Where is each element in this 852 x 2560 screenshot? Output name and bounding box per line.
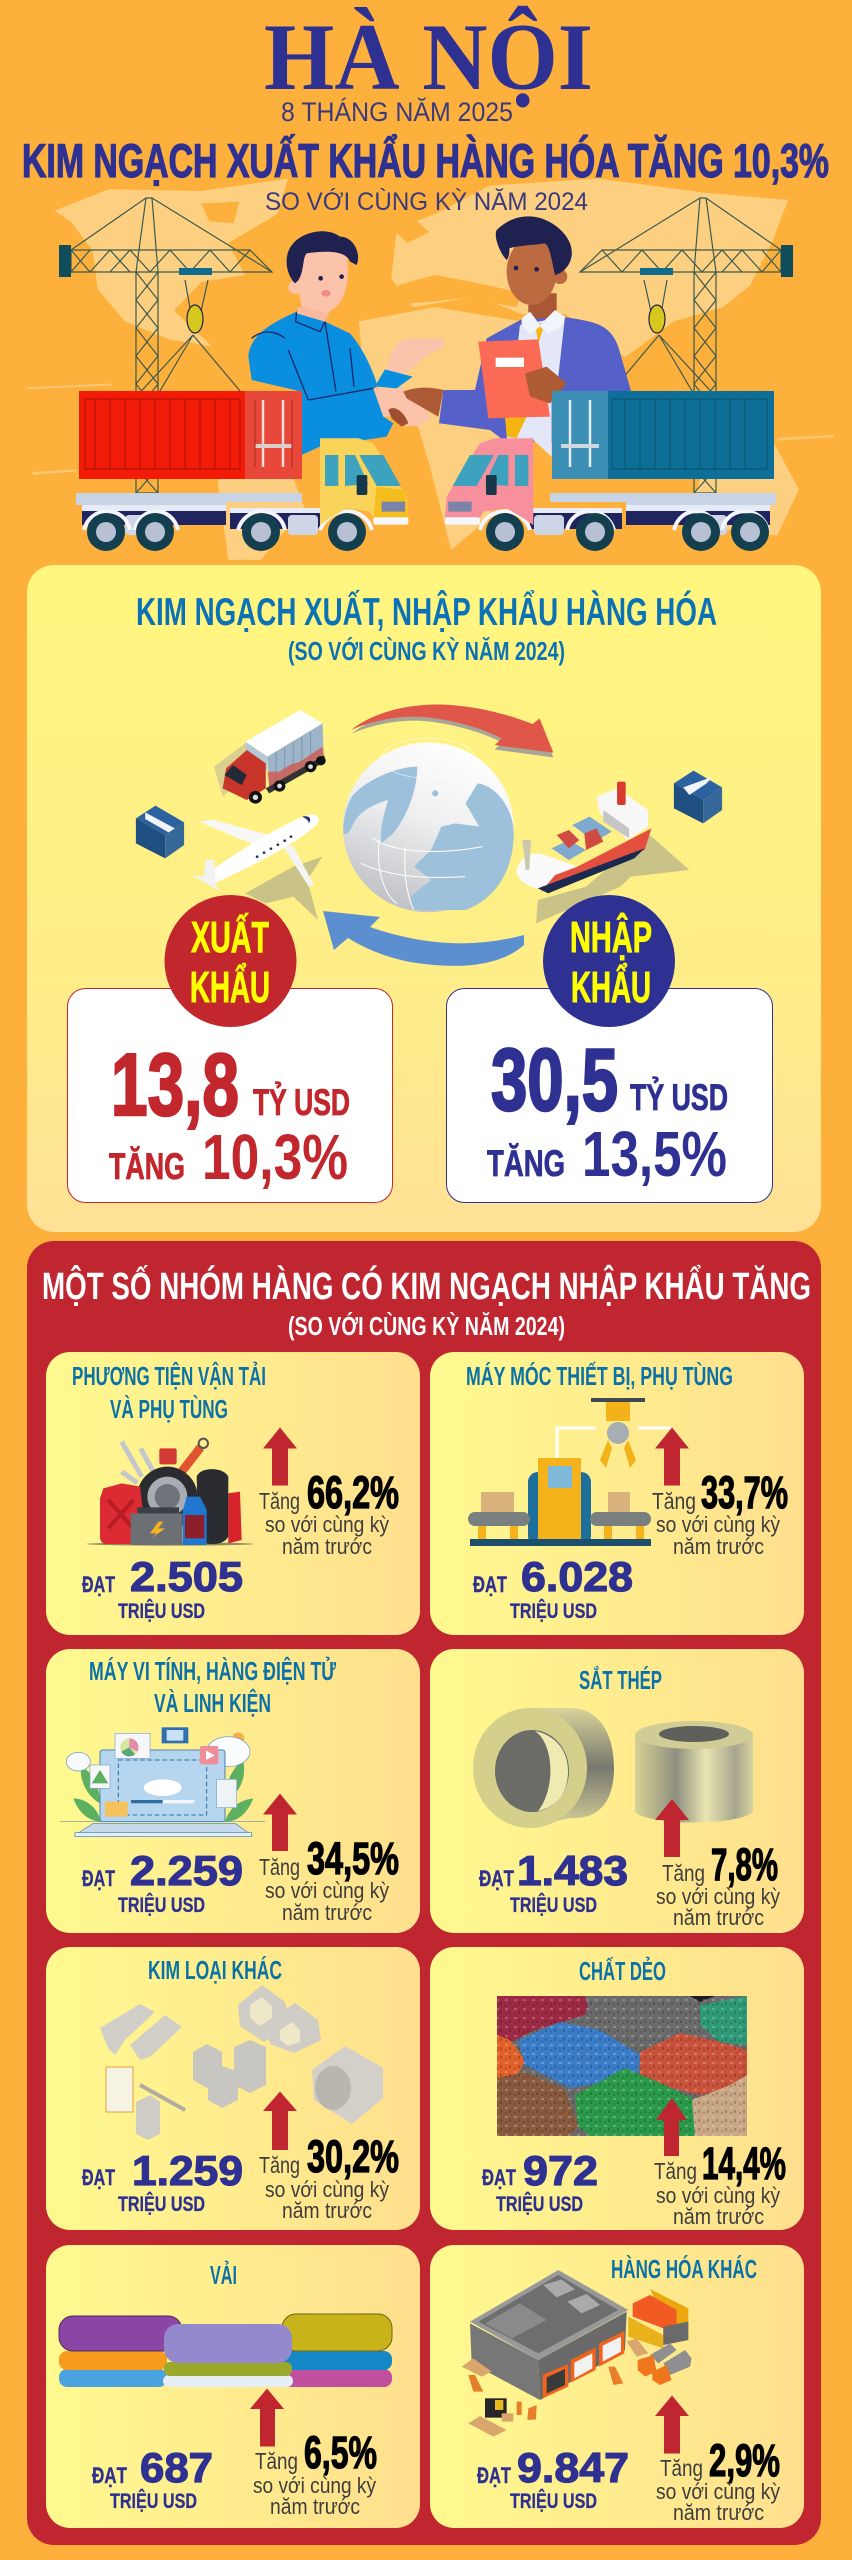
growth note: năm trước bbox=[282, 2198, 372, 2223]
value: 972 bbox=[523, 2147, 598, 2194]
growth note bbox=[654, 2138, 786, 2229]
growth note: so với cùng kỳ bbox=[265, 2177, 389, 2202]
growth note bbox=[253, 2427, 377, 2519]
right man in purple suit bbox=[439, 216, 632, 457]
icon: fabric stacks bbox=[59, 2314, 392, 2387]
arrow up bbox=[655, 1428, 689, 1486]
card: other goods bbox=[430, 2245, 804, 2528]
value: TRIỆU USD bbox=[118, 1893, 205, 1917]
growth note: Tăng bbox=[654, 2158, 697, 2184]
value: ĐẠT bbox=[92, 2463, 127, 2488]
badge: import: KHẨU bbox=[571, 961, 651, 1012]
card title: VÀ PHỤ TÙNG bbox=[110, 1394, 228, 1424]
label: increase: TĂNG bbox=[109, 1146, 185, 1187]
value bbox=[82, 1847, 243, 1917]
value bbox=[482, 2147, 598, 2216]
value: ĐẠT bbox=[479, 1866, 514, 1891]
photo: plastic granules bbox=[497, 1996, 747, 2136]
growth note bbox=[656, 2435, 780, 2525]
icon: cargo ship bbox=[516, 782, 689, 923]
growth note bbox=[259, 2131, 399, 2223]
icon: right parcel box bbox=[674, 771, 722, 823]
growth note: năm trước bbox=[673, 1534, 764, 1559]
icon: warehouse and logistics bbox=[462, 2270, 692, 2437]
comparison subtitle: SO VỚI CÙNG KỲ NĂM 2024 bbox=[265, 187, 588, 216]
badge: import bbox=[543, 895, 675, 1027]
badge: import: NHẬP bbox=[570, 912, 652, 962]
growth note: năm trước bbox=[673, 1905, 764, 1930]
value: TRIỆU USD bbox=[496, 2192, 583, 2216]
icon: steel coils bbox=[473, 1708, 753, 1828]
left man in blue shirt bbox=[248, 231, 445, 455]
left crane bbox=[59, 198, 272, 493]
growth note: Tăng bbox=[259, 2152, 300, 2178]
date line: 8 THÁNG NĂM 2025 bbox=[281, 97, 513, 127]
growth note: 6,5% bbox=[304, 2427, 377, 2478]
badge: export: XUẤT bbox=[191, 912, 269, 962]
label: increase: TĂNG bbox=[487, 1143, 565, 1184]
growth note: so với cùng kỳ bbox=[656, 1512, 780, 1537]
growth note: so với cùng kỳ bbox=[265, 1512, 389, 1537]
icon: metal products bbox=[100, 1985, 383, 2140]
growth note: năm trước bbox=[282, 1534, 372, 1559]
growth note: so với cùng kỳ bbox=[265, 1878, 389, 1903]
document folder bbox=[478, 339, 567, 418]
arrow up bbox=[655, 2396, 689, 2454]
growth note: năm trước bbox=[673, 2500, 764, 2525]
card: computers and electronics bbox=[46, 1649, 420, 1933]
growth note: 66,2% bbox=[307, 1467, 399, 1518]
hero illustration bbox=[59, 198, 793, 551]
growth note bbox=[259, 1833, 399, 1925]
growth note: năm trước bbox=[282, 1900, 372, 1925]
card title: KIM LOẠI KHÁC bbox=[148, 1955, 282, 1985]
red shipping container bbox=[79, 391, 302, 479]
growth note bbox=[652, 1467, 788, 1559]
value: TRIỆU USD bbox=[118, 2192, 205, 2216]
card title bbox=[89, 1655, 336, 1718]
badge: export bbox=[164, 895, 296, 1027]
growth note: Tăng bbox=[652, 1488, 696, 1514]
value: export turnover: 13,8 bbox=[111, 1035, 239, 1134]
value: import turnover: 30,5 bbox=[491, 1030, 618, 1129]
growth note: so với cùng kỳ bbox=[656, 1884, 780, 1909]
icon: left parcel box bbox=[136, 806, 184, 858]
value: import growth: 13,5% bbox=[582, 1118, 727, 1190]
card title: HÀNG HÓA KHÁC bbox=[611, 2254, 757, 2284]
world map background bbox=[27, 179, 834, 560]
panel subheading: (SO VỚI CÙNG KỲ NĂM 2024) bbox=[288, 1311, 565, 1341]
growth note: 33,7% bbox=[701, 1467, 788, 1518]
growth note: Tăng bbox=[255, 2448, 298, 2474]
icon: auto parts bbox=[87, 1439, 253, 1546]
card title: VẢI bbox=[210, 2260, 237, 2290]
value: 2.259 bbox=[130, 1847, 243, 1894]
card title: CHẤT DẺO bbox=[579, 1956, 666, 1986]
value: 1.259 bbox=[132, 2147, 243, 2194]
arrow up bbox=[655, 1799, 689, 1857]
panel: import-export turnover bbox=[27, 565, 821, 1232]
growth note bbox=[259, 1467, 399, 1559]
value: export growth: 10,3% bbox=[202, 1121, 348, 1193]
badge: export: KHẨU bbox=[190, 961, 270, 1012]
card: fabric bbox=[46, 2245, 420, 2528]
card title: SẮT THÉP bbox=[579, 1665, 662, 1695]
growth note: 34,5% bbox=[307, 1833, 399, 1884]
value: 687 bbox=[140, 2444, 213, 2491]
value: TRIỆU USD bbox=[510, 1893, 597, 1917]
value bbox=[82, 1553, 243, 1623]
growth note: Tăng bbox=[259, 1854, 300, 1880]
arrow up bbox=[250, 2388, 284, 2446]
value: TRIỆU USD bbox=[510, 1599, 597, 1623]
panel: import groups bbox=[27, 1241, 821, 2545]
right crane bbox=[580, 198, 793, 493]
arrow up bbox=[263, 1794, 297, 1851]
card: export figures bbox=[68, 988, 392, 1202]
card: machinery and parts bbox=[430, 1352, 804, 1635]
card title bbox=[72, 1361, 266, 1424]
growth note: 7,8% bbox=[711, 1839, 778, 1890]
value: 1.483 bbox=[517, 1847, 628, 1894]
growth note: Tăng bbox=[259, 1488, 300, 1514]
panel subheading: (SO VỚI CÙNG KỲ NĂM 2024) bbox=[288, 636, 565, 666]
left truck bbox=[76, 438, 408, 551]
growth note: năm trước bbox=[270, 2494, 360, 2519]
value: 6.028 bbox=[521, 1553, 633, 1600]
card title: MÁY VI TÍNH, HÀNG ĐIỆN TỬ bbox=[89, 1655, 336, 1686]
icon: container truck bbox=[214, 710, 326, 804]
blue shipping container bbox=[552, 391, 774, 479]
arrow: red export arrow bbox=[351, 705, 553, 757]
value: ĐẠT bbox=[82, 1572, 115, 1597]
value bbox=[477, 2444, 629, 2513]
growth note: so với cùng kỳ bbox=[656, 2479, 780, 2504]
growth note: năm trước bbox=[673, 2204, 764, 2229]
growth note: 2,9% bbox=[709, 2435, 780, 2486]
card: plastics bbox=[430, 1947, 804, 2230]
arrow up bbox=[263, 2092, 297, 2150]
unit: billion USD: TỶ USD bbox=[630, 1077, 728, 1118]
value bbox=[92, 2444, 213, 2513]
card: transport vehicles and parts bbox=[46, 1352, 420, 1635]
card: other metals bbox=[46, 1947, 420, 2230]
card title: PHƯƠNG TIỆN VẬN TẢI bbox=[72, 1361, 266, 1391]
icon: globe bbox=[343, 738, 514, 912]
value: ĐẠT bbox=[482, 2165, 516, 2190]
growth note: so với cùng kỳ bbox=[253, 2473, 376, 2498]
value: ĐẠT bbox=[477, 2463, 511, 2488]
icon: airplane bbox=[192, 815, 323, 920]
value: ĐẠT bbox=[82, 1866, 115, 1891]
card title: VÀ LINH KIỆN bbox=[154, 1688, 271, 1718]
arrow: blue import arrow bbox=[323, 911, 524, 966]
card: iron and steel bbox=[430, 1649, 804, 1933]
unit: billion USD: TỶ USD bbox=[253, 1082, 350, 1123]
arrow up bbox=[656, 2098, 687, 2156]
value: 2.505 bbox=[130, 1553, 243, 1600]
value bbox=[473, 1553, 633, 1623]
card: import figures bbox=[446, 988, 772, 1202]
value: 9.847 bbox=[517, 2444, 629, 2491]
value: ĐẠT bbox=[473, 1572, 507, 1597]
value: TRIỆU USD bbox=[118, 1599, 205, 1623]
value: TRIỆU USD bbox=[110, 2489, 197, 2513]
growth note bbox=[656, 1839, 780, 1930]
value: ĐẠT bbox=[82, 2165, 115, 2190]
value bbox=[82, 2147, 243, 2216]
growth note: 14,4% bbox=[702, 2138, 786, 2189]
title: Hà Nội: HÀ NỘI bbox=[264, 4, 593, 110]
handshake bbox=[388, 388, 443, 427]
icon: factory machine bbox=[468, 1398, 671, 1546]
growth note: Tăng bbox=[660, 2455, 703, 2481]
growth note: so với cùng kỳ bbox=[656, 2183, 780, 2208]
value bbox=[479, 1847, 628, 1917]
growth note: Tăng bbox=[662, 1860, 705, 1886]
arrow up bbox=[263, 1428, 297, 1486]
card title: MÁY MÓC THIẾT BỊ, PHỤ TÙNG bbox=[466, 1361, 733, 1391]
growth note: 30,2% bbox=[307, 2131, 399, 2182]
value: TRIỆU USD bbox=[510, 2489, 597, 2513]
right truck bbox=[445, 438, 776, 551]
icon: laptop and cloud bbox=[60, 1727, 265, 1837]
